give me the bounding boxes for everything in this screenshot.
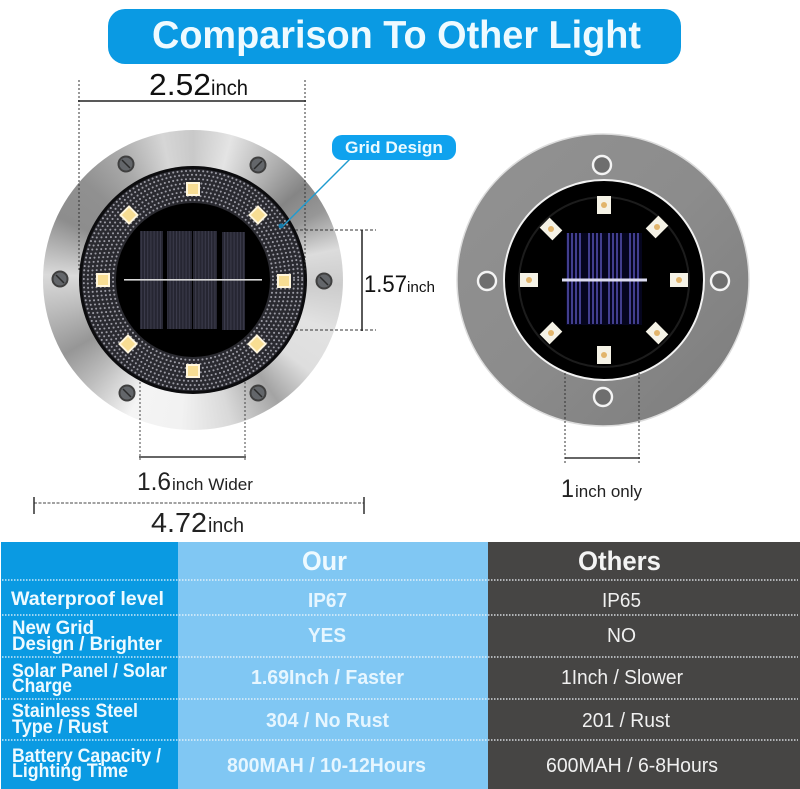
others light: LEDs	[520, 196, 688, 364]
others light: screws	[478, 156, 729, 406]
dimension: 1.6 inch wider	[137, 382, 253, 496]
dimension: 1.57 inch: inch	[407, 279, 435, 296]
dimension: 1.6 inch wider: 1.6	[137, 468, 171, 496]
dimension: 2.52 inch: 2.52	[149, 67, 211, 102]
table column: others: 600MAH / 6-8Hours	[546, 755, 718, 777]
others light product illustration	[457, 134, 749, 426]
table column: feature labels: New Grid	[12, 618, 94, 639]
table column: our: 304 / No Rust	[266, 710, 389, 732]
table column: feature labels: Design / Brighter	[12, 634, 163, 655]
our light: LEDs	[97, 183, 290, 377]
dimension: 2.52 inch: inch	[211, 77, 248, 100]
our light: screws	[52, 156, 332, 400]
callout: grid design	[278, 135, 456, 228]
dimension: 1 inch only: 1	[561, 475, 574, 503]
table column: feature labels: Type / Rust	[12, 717, 109, 738]
dimension: 4.72 inch	[34, 497, 364, 538]
table column: feature labels: Lighting Time	[12, 761, 128, 782]
table column: feature labels: Battery Capacity /	[12, 746, 162, 767]
table column: others: IP65	[602, 590, 641, 612]
table column: our: YES	[308, 625, 346, 647]
dimension: 2.52 inch	[78, 67, 306, 270]
table column: our: Our	[302, 546, 347, 576]
dimension: 1.57 inch	[295, 230, 435, 331]
dimension: 1 inch only	[561, 373, 642, 503]
table column: feature labels: Waterproof level	[11, 589, 164, 610]
our light product illustration	[43, 130, 343, 430]
table column: feature labels: Solar Panel / Solar	[12, 661, 168, 682]
title banner: Comparison To Other Light	[152, 14, 641, 57]
callout: grid design: Grid Design	[345, 138, 443, 157]
table column: others: 1Inch / Slower	[561, 667, 683, 689]
dimension: 1.6 inch wider: inch Wider	[172, 475, 253, 494]
table column: our: 1.69Inch / Faster	[251, 667, 404, 689]
table column: our: IP67	[308, 590, 347, 612]
table column: others: NO	[607, 625, 636, 647]
dimension: 4.72 inch: inch	[208, 515, 244, 537]
table column: feature labels: Stainless Steel	[12, 701, 138, 722]
dimension: 4.72 inch: 4.72	[151, 507, 207, 538]
our light: grid ring	[79, 166, 307, 394]
table column: our: 800MAH / 10-12Hours	[227, 755, 426, 777]
dimension: 1.57 inch: 1.57	[364, 271, 407, 298]
table column: feature labels	[1, 542, 178, 789]
table column: others	[488, 542, 800, 789]
dimension: 1 inch only: inch only	[575, 482, 642, 501]
table column: others: Others	[578, 546, 661, 576]
table column: feature labels: Charge	[12, 676, 72, 697]
table column: our	[178, 542, 488, 789]
comparison table	[1, 542, 800, 789]
our light: solar panel	[124, 231, 262, 330]
others light: solar panel	[562, 233, 647, 325]
table column: others: 201 / Rust	[582, 710, 670, 732]
title banner	[108, 9, 681, 64]
